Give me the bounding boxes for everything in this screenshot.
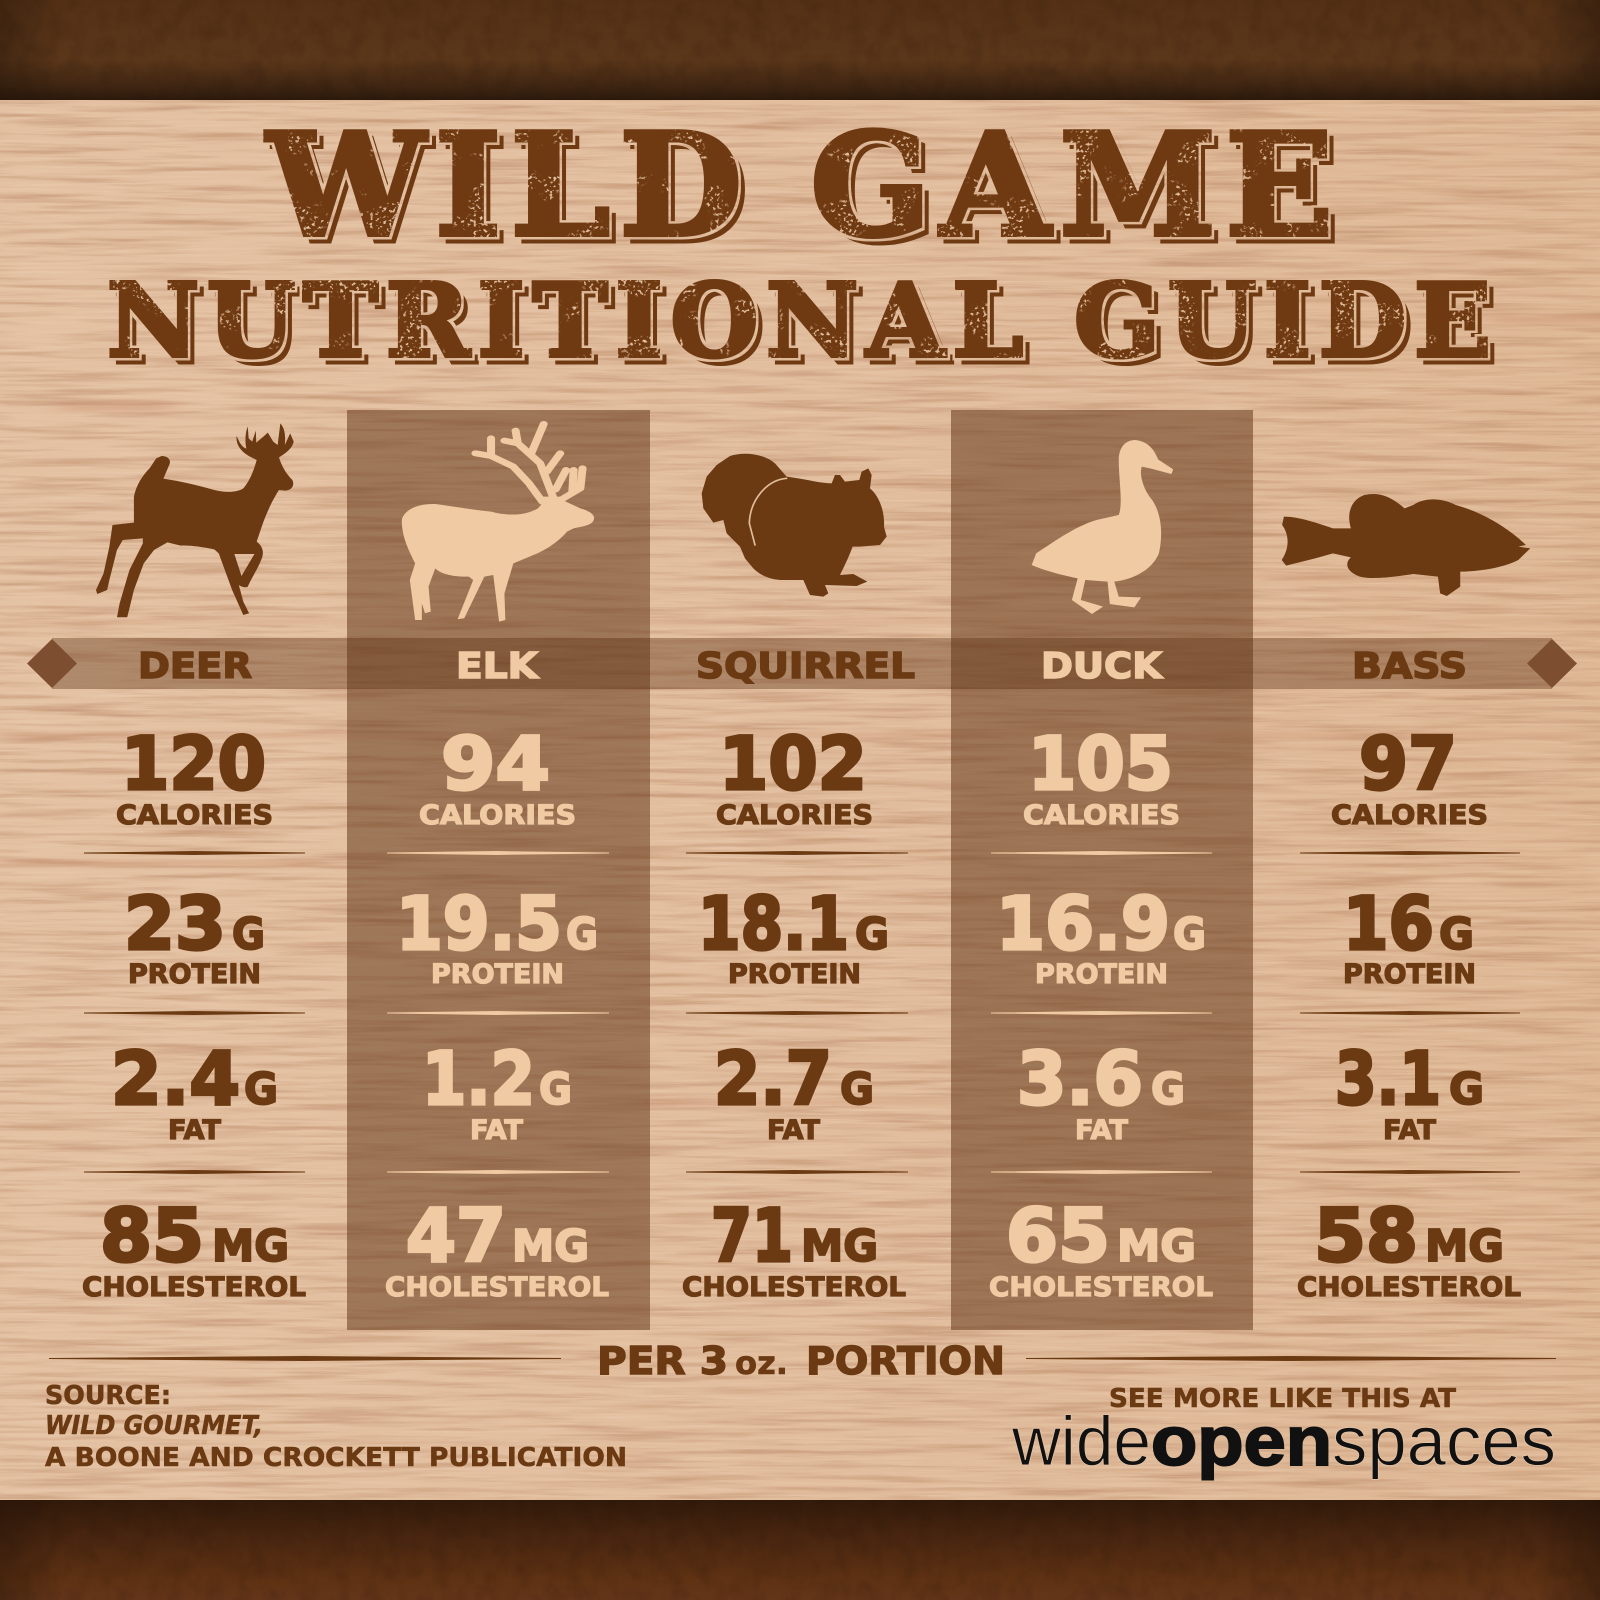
stat: fat: G: [1151, 1064, 1185, 1115]
icon: bass silhouette: [1282, 494, 1530, 596]
title: [107, 104, 1491, 380]
title: NUTRITIONAL GUIDE: [107, 261, 1491, 380]
stat: fat: [111, 1037, 278, 1146]
logo: wideopenspaces: wide: [1011, 1402, 1151, 1480]
portion note: oz.: [735, 1344, 788, 1382]
call to action: SEE MORE LIKE THIS AT: [1109, 1384, 1456, 1414]
stat: calories: 94: [441, 722, 550, 807]
stat: protein: G: [1173, 909, 1206, 960]
stat: cholesterol: MG: [801, 1221, 878, 1272]
stat: calories: CALORIES: [116, 800, 273, 831]
source credit: [45, 1381, 627, 1473]
stat: protein: G: [566, 909, 598, 960]
stat: cholesterol: [989, 1194, 1213, 1303]
logo: wideopenspaces: open: [1151, 1402, 1332, 1480]
stat: cholesterol: CHOLESTEROL: [385, 1272, 609, 1303]
stat: protein: PROTEIN: [128, 959, 261, 990]
stat: protein: [124, 882, 265, 990]
stat: protein: G: [1439, 909, 1474, 960]
label: elk: ELK: [456, 646, 539, 687]
panel: duck column highlight: [951, 410, 1253, 1330]
stat: cholesterol: [682, 1194, 906, 1303]
stat: fat: [1017, 1037, 1185, 1146]
stat: fat: 3.6: [1017, 1037, 1143, 1122]
title: WILD GAME: [265, 104, 1333, 268]
portion note: [49, 1339, 1556, 1383]
stat: protein: 16: [1343, 882, 1434, 967]
column: bass: [1282, 494, 1530, 1303]
stat: fat: FAT: [168, 1115, 222, 1146]
stat: cholesterol: MG: [212, 1221, 289, 1272]
logo: wideopenspaces: [1011, 1402, 1556, 1480]
icon: elk silhouette: [402, 424, 594, 622]
column: duck: [989, 440, 1213, 1303]
stat: protein: G: [232, 909, 265, 960]
column: elk: [385, 424, 609, 1303]
stat: fat: FAT: [470, 1115, 524, 1146]
ribbon left diamond: [27, 639, 77, 688]
logo: wideopenspaces: spaces: [1332, 1402, 1556, 1480]
stat: protein: 18.1: [698, 882, 849, 967]
stat: fat: 2.7: [714, 1037, 832, 1122]
stat: protein: PROTEIN: [431, 959, 564, 990]
stat: cholesterol: CHOLESTEROL: [989, 1272, 1213, 1303]
stat: cholesterol: [385, 1194, 609, 1303]
stat: fat: FAT: [767, 1115, 821, 1146]
ribbon band: [52, 638, 1552, 689]
stat: fat: FAT: [1383, 1115, 1437, 1146]
label: duck: DUCK: [1041, 646, 1163, 687]
panel: elk column highlight: [347, 410, 650, 1330]
top leather band: [0, 0, 1600, 100]
stat: fat: 3.1: [1335, 1037, 1441, 1122]
stat: cholesterol: 71: [711, 1194, 793, 1279]
source credit: A BOONE AND CROCKETT PUBLICATION: [45, 1443, 627, 1473]
icon: duck silhouette: [1032, 440, 1173, 614]
stat: fat: G: [244, 1064, 278, 1115]
stat: protein: [1343, 882, 1476, 990]
stat: calories: CALORIES: [716, 800, 873, 831]
stat: cholesterol: MG: [1117, 1221, 1196, 1272]
stat: cholesterol: 85: [100, 1194, 204, 1279]
column: deer: [82, 423, 306, 1303]
label: squirrel: SQUIRREL: [696, 646, 915, 687]
stat: calories: CALORIES: [1023, 800, 1180, 831]
stat: protein: 23: [124, 882, 226, 967]
stat: cholesterol: CHOLESTEROL: [682, 1272, 906, 1303]
column: squirrel: [682, 454, 915, 1303]
stat: cholesterol: CHOLESTEROL: [1297, 1272, 1521, 1303]
stat: cholesterol: [1297, 1194, 1521, 1303]
stat: cholesterol: 65: [1006, 1194, 1110, 1279]
stat: cholesterol: MG: [1425, 1221, 1504, 1272]
bottom leather band: [0, 1500, 1600, 1600]
label: bass: BASS: [1352, 646, 1467, 687]
stat: fat: G: [840, 1064, 874, 1115]
stat: fat: [1335, 1037, 1484, 1146]
stat: protein: 19.5: [396, 882, 562, 967]
portion note: PORTION: [806, 1339, 1005, 1383]
stat: calories: 97: [1359, 722, 1457, 807]
portion note: PER 3: [597, 1339, 728, 1383]
stat: fat: [714, 1037, 874, 1146]
stat: cholesterol: MG: [512, 1221, 589, 1272]
icon: squirrel silhouette: [702, 454, 887, 597]
stat: calories: CALORIES: [419, 800, 576, 831]
stat: fat: FAT: [1075, 1115, 1129, 1146]
stat: cholesterol: 58: [1314, 1194, 1418, 1279]
ribbon right diamond: [1527, 639, 1577, 688]
stat: protein: 16.9: [996, 882, 1170, 967]
stat: calories: [419, 722, 576, 831]
stat: protein: PROTEIN: [728, 959, 861, 990]
stat: fat: G: [539, 1064, 572, 1115]
stat: cholesterol: 47: [406, 1194, 506, 1279]
stat: protein: [996, 882, 1206, 990]
stat: protein: PROTEIN: [1035, 959, 1168, 990]
stat: fat: 2.4: [111, 1037, 240, 1122]
source credit: WILD GOURMET,: [45, 1411, 263, 1441]
stat: calories: 102: [719, 722, 867, 807]
stat: calories: [1331, 722, 1488, 831]
stat: cholesterol: [82, 1194, 306, 1303]
source credit: SOURCE:: [45, 1381, 171, 1411]
stat: calories: CALORIES: [1331, 800, 1488, 831]
stat: fat: 1.2: [422, 1037, 535, 1122]
stat: protein: PROTEIN: [1343, 959, 1476, 990]
stat: fat: G: [1449, 1064, 1484, 1115]
label: deer: DEER: [138, 646, 252, 687]
stat: calories: 105: [1028, 722, 1173, 807]
stat: calories: 120: [121, 722, 266, 807]
icon: deer silhouette: [96, 423, 294, 617]
stat: fat: [422, 1037, 572, 1146]
stat: protein: G: [855, 909, 889, 960]
stat: cholesterol: CHOLESTEROL: [82, 1272, 306, 1303]
